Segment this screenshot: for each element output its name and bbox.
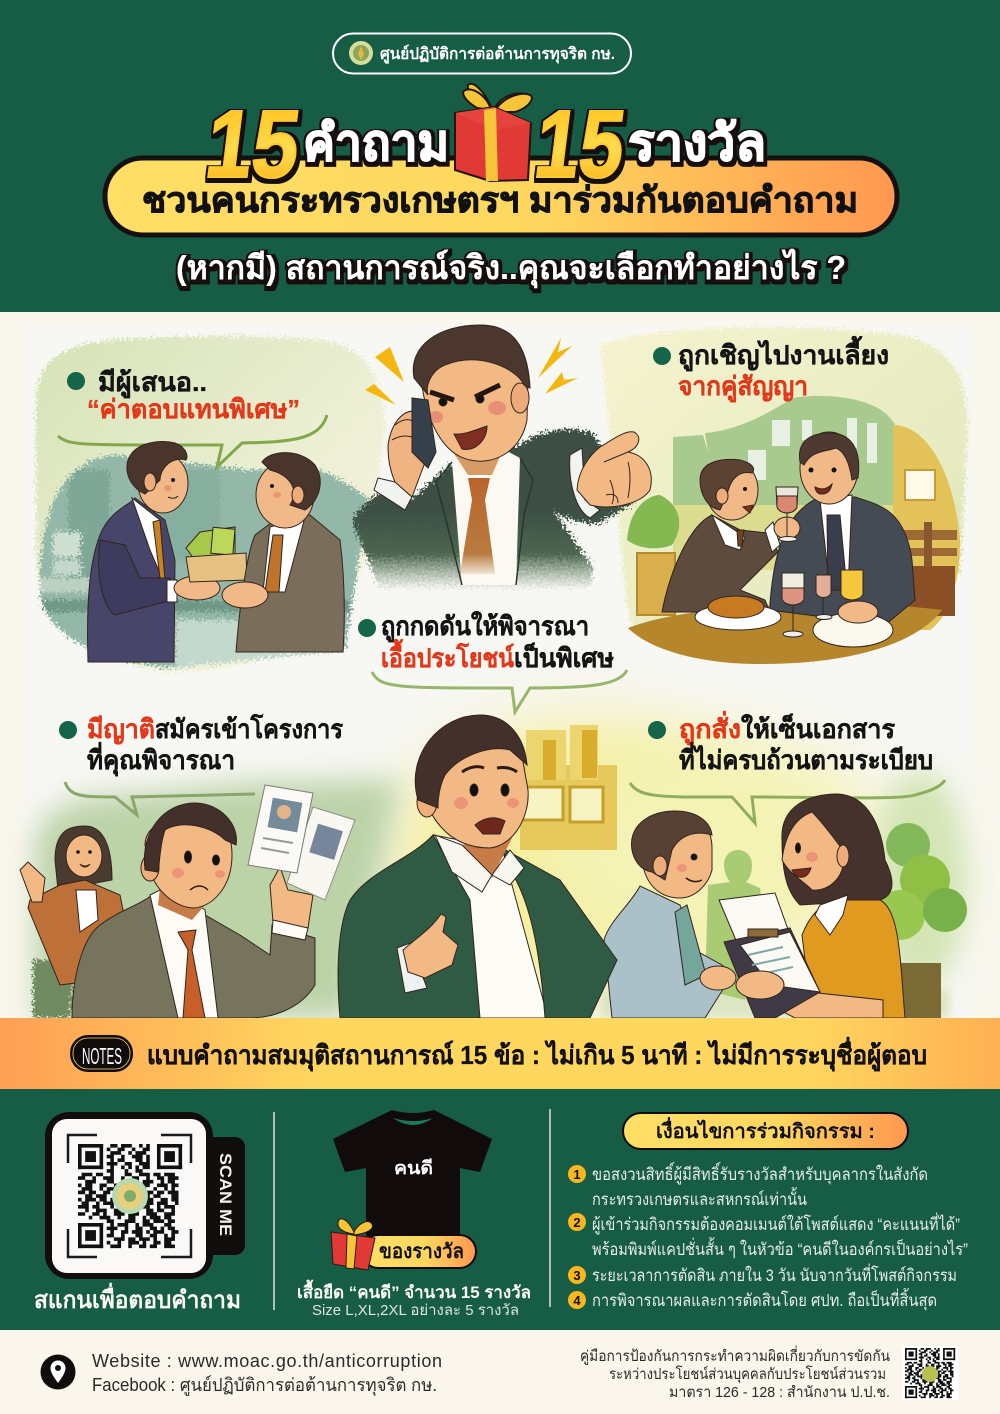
heading bbox=[648, 710, 933, 775]
manual reference: ระหว่างประโยชน์ส่วนบุคคลกับประโยชน์ส่วนรวม bbox=[609, 1365, 886, 1384]
heading: ที่ไม่ครบถ้วนตามระเบียบ bbox=[679, 741, 933, 775]
subtitle pill bbox=[105, 158, 897, 235]
manual reference: มาตรา 126 - 128 : สำนักงาน ป.ป.ช. bbox=[669, 1384, 890, 1401]
condition 4: 4 bbox=[573, 1293, 581, 1308]
title: 15 bbox=[200, 91, 306, 198]
heading: สมัครเข้าโครงการ bbox=[155, 713, 343, 744]
panel: special compensation offer bbox=[30, 336, 385, 675]
plants bbox=[875, 823, 967, 1018]
scene background bbox=[30, 450, 380, 675]
speech bubble bbox=[65, 782, 255, 815]
panel: angry man on phone bbox=[352, 325, 651, 590]
heading: มีญาติ bbox=[87, 714, 155, 745]
panel: pressured bbox=[358, 611, 627, 712]
conditions bbox=[568, 1113, 968, 1311]
title bbox=[200, 84, 766, 198]
corner brackets bbox=[68, 1135, 191, 1257]
neck bbox=[445, 440, 505, 475]
man in grey suit bbox=[770, 432, 915, 625]
notes band bbox=[0, 1018, 1000, 1089]
notes badge bbox=[70, 1035, 133, 1072]
condition 1: 1 bbox=[573, 1167, 581, 1182]
icon: location pin bbox=[40, 1354, 76, 1390]
man giving envelope bbox=[88, 441, 220, 662]
panel: pressured: ถูกกดดันให้พิจารณา bbox=[381, 611, 589, 643]
phone hand bbox=[374, 398, 436, 510]
prize ribbon: ของรางวัล bbox=[379, 1241, 464, 1263]
seal bbox=[112, 1178, 148, 1214]
title: 15 bbox=[529, 91, 631, 198]
condition 3: 3 bbox=[573, 1268, 581, 1283]
panel: pressured: เอื้อประโยชน์ bbox=[381, 638, 514, 673]
condition 1: ขอสงวนสิทธิ์ผู้มีสิทธิ์รับรางวัลสำหรับบุคลากรในสังกัด bbox=[592, 1162, 928, 1185]
scan label: สแกนเพื่อตอบคำถาม bbox=[34, 1282, 241, 1314]
heading bbox=[67, 367, 300, 424]
man with a worried face bbox=[72, 803, 315, 1018]
heading: ถูกสั่ง bbox=[679, 710, 741, 746]
envelope with money bbox=[186, 527, 247, 582]
heading: ให้เซ็นเอกสาร bbox=[741, 713, 895, 744]
pointing hand bbox=[570, 432, 651, 518]
man in blue shirt bbox=[604, 811, 736, 1018]
condition 2 bbox=[568, 1212, 968, 1259]
manual reference bbox=[580, 1345, 890, 1401]
scene background bbox=[35, 780, 400, 1018]
manual reference: คู่มือการป้องกันการกระทำความผิดเกี่ยวกับการขัดกัน bbox=[580, 1345, 890, 1365]
prize ribbon bbox=[362, 1235, 476, 1268]
profile cards bbox=[248, 785, 355, 900]
clipboard bbox=[719, 893, 820, 1018]
dividers bbox=[274, 1109, 550, 1310]
condition 1 bbox=[568, 1162, 928, 1209]
wine glasses bbox=[776, 487, 863, 637]
condition 4 bbox=[568, 1288, 937, 1311]
condition 2: 2 bbox=[573, 1215, 581, 1230]
icon: ministry seal bbox=[349, 41, 373, 65]
heading bbox=[653, 335, 889, 403]
suit bbox=[352, 429, 633, 590]
illustration background bbox=[0, 312, 1000, 1020]
plates and food bbox=[695, 596, 893, 647]
scan me tab bbox=[205, 1137, 245, 1255]
conditions heading bbox=[623, 1113, 908, 1149]
face bbox=[413, 325, 530, 461]
subtitle pill: ชวนคนกระทรวงเกษตรฯ มาร่วมกันตอบคำถาม bbox=[142, 181, 858, 220]
heading bbox=[59, 713, 343, 777]
question line: (หากมี) สถานการณ์จริง..คุณจะเลือกทำอย่างไร ? bbox=[176, 248, 846, 289]
top badge bbox=[333, 34, 631, 74]
prize t-shirt: Size L,XL,2XL อย่างละ 5 รางวัล bbox=[312, 1302, 519, 1319]
contact text bbox=[92, 1351, 442, 1396]
table bbox=[628, 604, 942, 664]
header background bbox=[0, 0, 1000, 312]
restaurant background bbox=[627, 396, 960, 630]
conditions heading: เงื่อนไขการร่วมกิจกรรม : bbox=[656, 1116, 875, 1143]
panel: ordered to sign bbox=[604, 710, 967, 1018]
scan me tab: SCAN ME bbox=[216, 1153, 235, 1236]
panel: invited to party bbox=[600, 327, 968, 664]
green silhouette bbox=[705, 850, 765, 1000]
condition 4: การพิจารณาผลและการตัดสินโดย ศปท. ถือเป็นที่สิ้นสุด bbox=[592, 1288, 937, 1311]
icon: small gift bbox=[331, 1219, 375, 1270]
man receiving envelope bbox=[222, 453, 344, 652]
woman in orange blouse bbox=[770, 794, 905, 1018]
panel: center man bbox=[338, 715, 617, 1018]
heading: มีผู้เสนอ.. bbox=[98, 367, 207, 399]
condition 1: กระทรวงเกษตรและสหกรณ์เท่านั้น bbox=[592, 1187, 807, 1209]
notes band: แบบคำถามสมมุติสถานการณ์ 15 ข้อ : ไม่เกิน 5 นาที : ไม่มีการระบุชื่อผู้ตอบ bbox=[147, 1036, 927, 1072]
woman waving bbox=[20, 826, 125, 985]
speech bubble bbox=[630, 780, 945, 823]
contact text: Facebook : ศูนย์ปฏิบัติการต่อต้านการทุจริต กษ. bbox=[92, 1375, 437, 1396]
cuff bbox=[397, 943, 427, 993]
bottom green section bbox=[0, 1089, 1000, 1330]
woman's hand bbox=[736, 971, 784, 999]
notes badge: NOTES bbox=[82, 1043, 122, 1069]
icon: gift box bbox=[455, 84, 532, 181]
shirt and tie bbox=[452, 445, 520, 585]
footer bbox=[0, 1330, 1000, 1414]
heading: จากคู่สัญญา bbox=[678, 371, 808, 403]
prize t-shirt: เสื้อยืด “คนดี” จำนวน 15 รางวัล bbox=[297, 1279, 531, 1302]
yellow buildings bbox=[520, 725, 617, 850]
heading: “ค่าตอบแทนพิเศษ” bbox=[87, 394, 300, 424]
small qr code bbox=[902, 1346, 958, 1400]
heading: ถูกเชิญไปงานเลี้ยง bbox=[678, 335, 889, 372]
prize t-shirt bbox=[297, 1110, 531, 1319]
yellow bolts bbox=[365, 338, 578, 405]
qr card bbox=[45, 1112, 245, 1279]
pointing hand bbox=[403, 914, 458, 978]
prize t-shirt: คนดี bbox=[394, 1158, 433, 1178]
heading: ที่คุณพิจารณา bbox=[87, 741, 235, 777]
speech bubble bbox=[58, 415, 327, 467]
title: รางวัล bbox=[628, 115, 766, 171]
man raising glass bbox=[662, 459, 800, 612]
panel: relative applying bbox=[20, 713, 400, 1018]
title: คำถาม bbox=[303, 115, 449, 171]
contact text: Website : www.moac.go.th/anticorruption bbox=[92, 1351, 442, 1371]
top badge: ศูนย์ปฏิบัติการต่อต้านการทุจริต กษ. bbox=[380, 44, 615, 65]
panel: pressured: เป็นพิเศษ bbox=[514, 642, 614, 673]
qr code bbox=[78, 1144, 182, 1248]
